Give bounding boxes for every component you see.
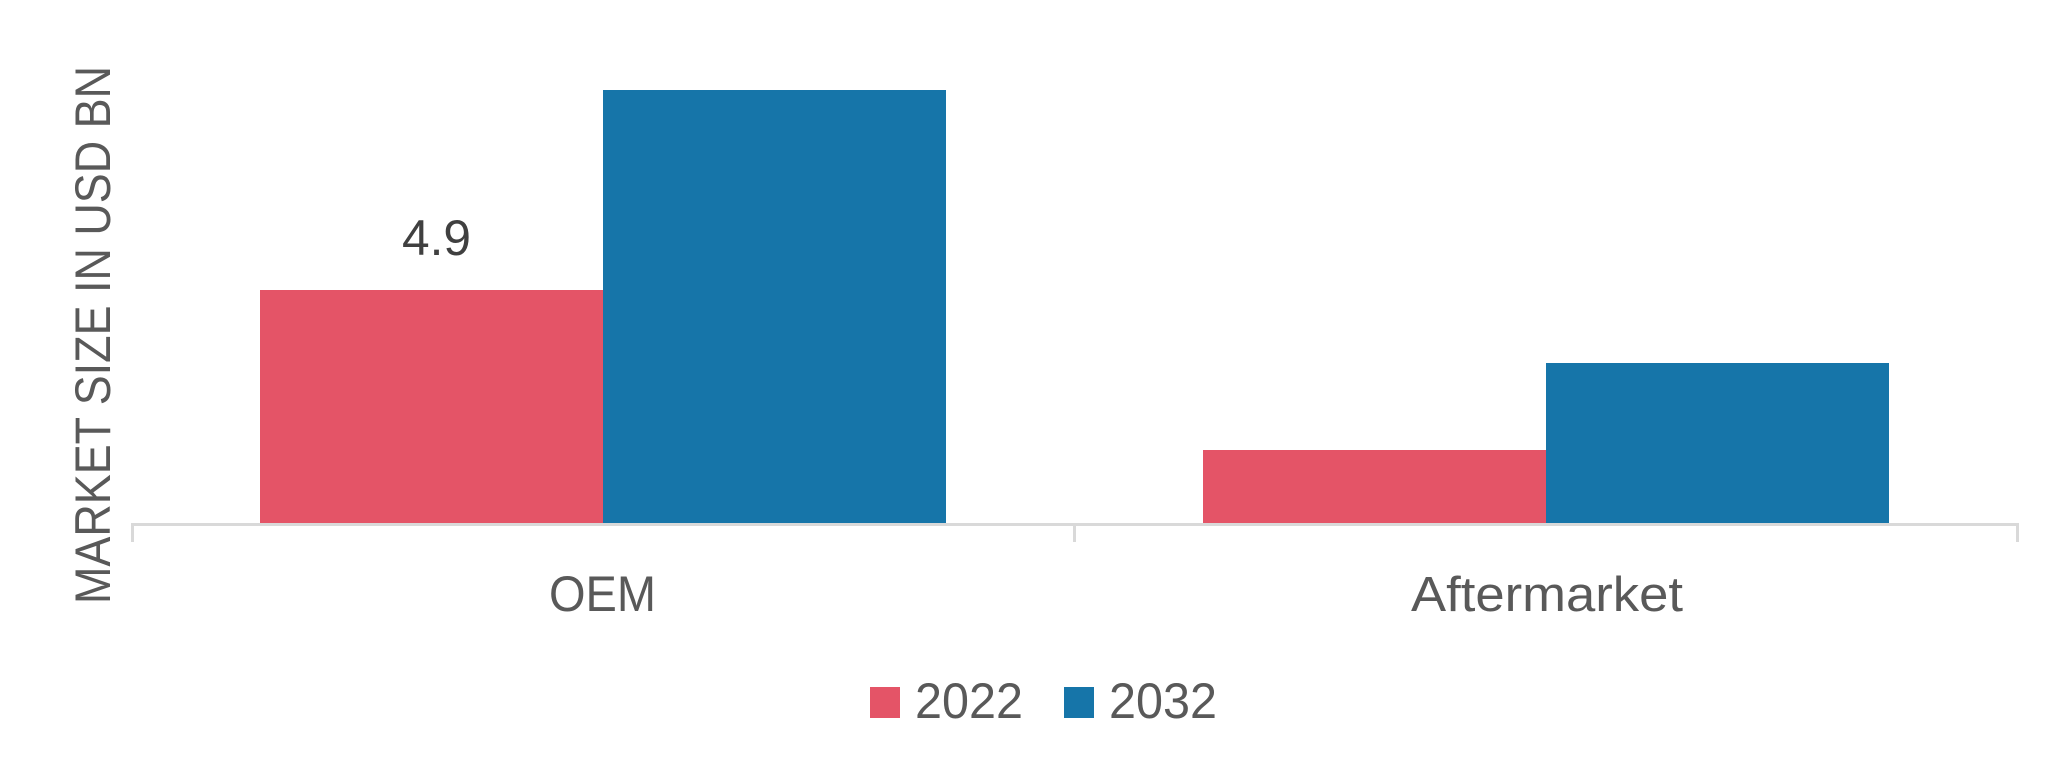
legend label: 2022: 2022 — [915, 673, 1023, 729]
legend swatch: 2032 — [1064, 687, 1094, 718]
x axis with ticks — [131, 523, 2019, 542]
bar: Aftermarket 2022 — [1203, 450, 1546, 523]
bar: OEM 2032 — [603, 90, 946, 523]
data label: 4.9: 4.9 — [402, 210, 471, 266]
legend — [870, 673, 1217, 729]
y-axis title: MARKET SIZE IN USD BN — [65, 66, 121, 604]
category label: OEM: OEM — [549, 566, 656, 622]
legend label: 2032: 2032 — [1109, 673, 1217, 729]
legend swatch: 2022 — [870, 687, 900, 718]
category label: Aftermarket: Aftermarket — [1411, 568, 1683, 622]
bar: OEM 2022 — [260, 290, 603, 523]
bar: Aftermarket 2032 — [1546, 363, 1889, 523]
